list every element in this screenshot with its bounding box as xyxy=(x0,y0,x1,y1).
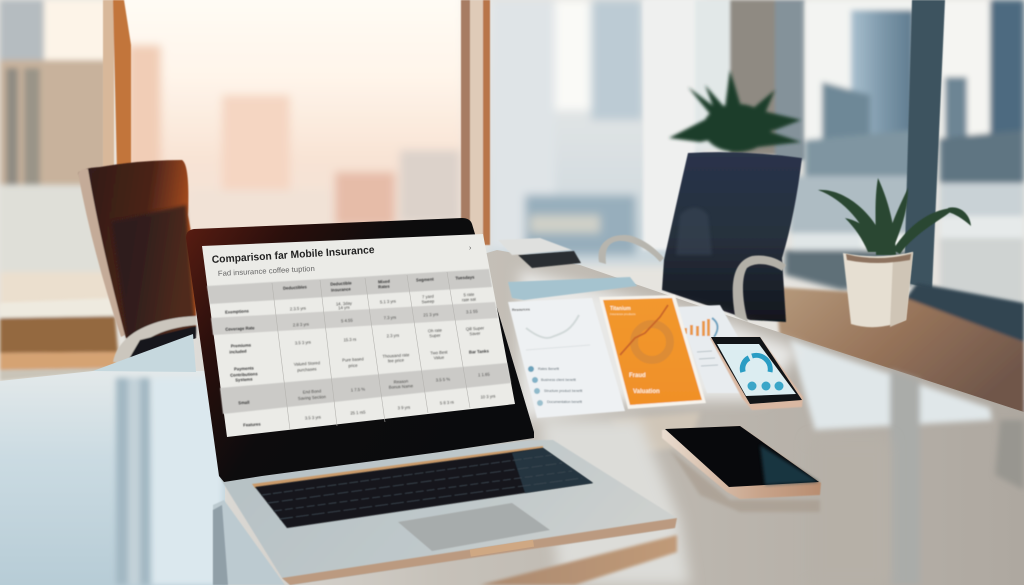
table text: Pure based xyxy=(342,356,364,363)
potted plant, right xyxy=(818,178,971,327)
table text: Value xyxy=(434,355,445,360)
office chair, left xyxy=(78,160,196,364)
table text: Tuesdays xyxy=(455,274,475,281)
table text: Premiums xyxy=(231,342,252,349)
table text: 2.3 yrs xyxy=(386,333,399,338)
table text: Systems xyxy=(235,377,253,382)
bullet list: Business client benefit xyxy=(541,378,576,382)
orange report card xyxy=(599,295,706,409)
bullet list: Structure product benefit xyxy=(544,389,582,393)
chair arm xyxy=(113,316,196,362)
table text: Rates xyxy=(378,284,390,289)
glass table top xyxy=(0,250,1024,585)
table text: 14. 3day xyxy=(336,300,353,306)
background: windows and city skyline xyxy=(0,0,1024,400)
chair back xyxy=(662,152,802,322)
base reflection on table xyxy=(480,535,677,585)
left window sill xyxy=(0,298,118,381)
office chair, right xyxy=(598,152,802,322)
trackpad xyxy=(398,503,550,551)
rising trend line xyxy=(620,305,668,355)
table text: price xyxy=(348,363,358,368)
orange report card: Insurance products xyxy=(610,312,636,316)
table text: Segment xyxy=(416,276,434,283)
table text: 2.3.5 yrs xyxy=(290,306,306,311)
leaves xyxy=(818,178,971,255)
table rules xyxy=(272,272,470,430)
table text: Deductibles xyxy=(283,284,308,291)
potted plant behind chair xyxy=(669,70,801,152)
table text: Small xyxy=(238,400,250,405)
laptop base xyxy=(220,440,677,585)
flat phone on table xyxy=(662,426,821,512)
left armrest xyxy=(598,235,664,264)
table text: Reason xyxy=(394,378,409,384)
table text xyxy=(225,274,496,428)
table reflections xyxy=(116,340,1024,585)
bullet list: Documentation benefit xyxy=(547,400,582,404)
table text: Valued Stored xyxy=(294,360,321,367)
table text: Oh rate xyxy=(428,328,443,333)
table text: 21 3 yrs xyxy=(423,312,438,317)
table text: 5 rate xyxy=(463,292,475,297)
table text: 3 9 yrs xyxy=(397,405,410,410)
centre window with sunlit haze xyxy=(118,0,464,235)
table left surface xyxy=(0,371,225,585)
pot xyxy=(843,252,913,327)
table text: Super xyxy=(429,333,441,338)
table right surface xyxy=(190,250,1024,585)
gauge icon xyxy=(743,358,749,372)
bar chart xyxy=(684,319,710,336)
table text: 3.5 5 % xyxy=(436,377,450,382)
table text: Contributions xyxy=(230,371,258,378)
orange report card: Valuation xyxy=(633,389,660,395)
table text: 14 yrs xyxy=(338,305,350,310)
table text: 7.3 yrs xyxy=(383,315,396,320)
left reflection under base xyxy=(213,500,285,585)
table text: Qill Super xyxy=(466,325,485,332)
table text: Coverage Rate xyxy=(225,325,255,332)
phone screen xyxy=(717,344,796,396)
wall pillar xyxy=(643,0,805,250)
screen subtitle: Fad insurance coffee tuption xyxy=(218,264,315,278)
bullet list: Rates Benefit xyxy=(538,367,559,371)
table text: 1 7.5 % xyxy=(351,387,365,392)
table text: Saving Section xyxy=(298,394,327,401)
table text: 15.3 rs xyxy=(343,337,356,342)
far right window xyxy=(785,0,1024,308)
table text: 25 1 rs5 xyxy=(350,409,366,415)
keyboard xyxy=(255,448,593,528)
window frames xyxy=(103,0,945,290)
wood floor and sill, right xyxy=(775,283,1024,420)
table text: 3.5 3 yrs xyxy=(305,414,321,421)
table text: Features xyxy=(243,421,261,428)
laptop xyxy=(186,218,677,585)
laptop lid xyxy=(186,218,534,482)
table text: 3.5 3 yrs xyxy=(295,340,311,345)
table text: Bonus Name xyxy=(389,383,414,390)
laptop screen xyxy=(202,234,515,437)
front edge xyxy=(282,518,677,585)
table text: 5 8 3 rs xyxy=(440,400,454,405)
table text: 1 1.65 xyxy=(478,372,491,377)
hinge strip xyxy=(252,446,543,488)
table text: included xyxy=(229,349,247,354)
table text: Mixed xyxy=(378,279,390,284)
table text: 5 4.55 xyxy=(341,318,354,323)
bullet list xyxy=(528,366,582,406)
table text: Insurance xyxy=(331,286,352,293)
left window with hazy buildings xyxy=(0,0,110,310)
lower cushion shading xyxy=(112,205,196,345)
printed report, left xyxy=(508,298,625,418)
table text: rate sat xyxy=(462,297,477,302)
screen title: Comparison far Mobile Insurance xyxy=(211,244,375,266)
table text: Two Best xyxy=(430,349,448,356)
table text: Exemptions xyxy=(225,308,250,315)
printed report, left: Resources xyxy=(512,307,530,312)
table text: fee price xyxy=(388,357,405,363)
table text: purchases xyxy=(297,366,317,373)
right armrest xyxy=(733,255,786,322)
line chart xyxy=(526,315,579,338)
comparison table bands xyxy=(207,269,511,414)
table text: 3.1 55 xyxy=(466,309,479,314)
table text: Saver xyxy=(469,331,481,336)
table text: Bar Tanks xyxy=(469,348,490,355)
right-centre window with blue towers xyxy=(488,0,703,265)
table text: Thousand rate xyxy=(382,352,410,359)
table text: Sweep xyxy=(421,299,435,304)
table text: Deductible xyxy=(330,280,352,287)
table edge strip by chair xyxy=(93,334,196,372)
chevron: › xyxy=(469,245,472,252)
orange report card: Titanium xyxy=(610,306,631,312)
phone shadow reflection xyxy=(670,450,820,512)
orange report card: Fraud xyxy=(629,373,646,379)
table text: 5.1 3 yrs xyxy=(380,299,396,304)
printed chart sheet, right xyxy=(677,305,752,393)
back-of-desk notebook and tablet xyxy=(498,238,637,300)
table text: 10 3 yrs xyxy=(480,394,496,399)
upright phone with blue gauge xyxy=(710,337,803,410)
table text: 2.8 3 yrs xyxy=(293,322,309,327)
table text: Payments xyxy=(234,365,255,372)
table text: 7 yard xyxy=(422,294,435,299)
table text: End Bond xyxy=(303,388,322,395)
